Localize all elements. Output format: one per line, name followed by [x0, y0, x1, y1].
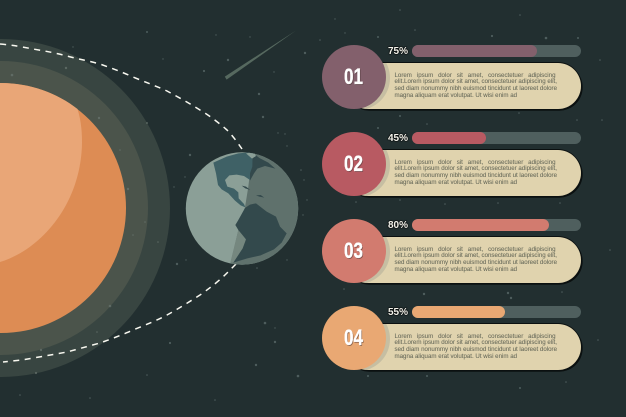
item 04 [322, 306, 583, 372]
number 01: 01 [344, 64, 364, 89]
body text 02 [394, 158, 557, 186]
body text 01: elit.Lorem ipsum dolor sit amet, consectetuer adipiscing elit, [394, 78, 557, 85]
body text 02: magna aliquam erat volutpat. Ut wisi enim ad [394, 179, 517, 186]
text panel 03 [345, 236, 581, 283]
body text 03 [394, 246, 557, 273]
circle 02 [322, 132, 386, 196]
sun with glow rings [0, 39, 170, 377]
body text 01: magna aliquam erat volutpat. Ut wisi enim ad [394, 92, 517, 99]
body text 03: magna aliquam erat volutpat. Ut wisi enim ad [394, 266, 517, 273]
percentage 45%: 45% [388, 132, 408, 144]
Arctic patch [246, 152, 256, 159]
Caribbean islands [242, 186, 264, 198]
circle 01 [322, 45, 386, 109]
text panel 04 [345, 324, 581, 370]
body text 02: sed diam nonummy nibh euismod tincidunt ut laoreet dolore [394, 172, 557, 179]
body text 04: Lorem ipsum dolor sit amet, consectetuer adipiscing [394, 332, 556, 340]
North America, lit side [213, 152, 253, 207]
number 03: 03 [344, 238, 364, 263]
sun outer ring [0, 39, 170, 377]
percentage 55%: 55% [388, 306, 408, 318]
earth globe base [186, 152, 298, 265]
body text 03: sed diam nonummy nibh euismod tincidunt ut laoreet dolore [394, 259, 557, 266]
body text 01: Lorem ipsum dolor sit amet, consectetuer adipiscing [394, 72, 556, 78]
ring stars [11, 67, 159, 374]
progress bar 75% [412, 45, 581, 57]
number 02: 02 [344, 151, 364, 176]
sun highlight [0, 83, 82, 262]
progress bar 45% [412, 132, 581, 144]
orbit path [0, 44, 242, 149]
body text 04 [394, 332, 557, 360]
body text 02: elit.Lorem ipsum dolor sit amet, consectetuer adipiscing elit, [394, 165, 557, 172]
earth [186, 150, 303, 270]
sun disc [0, 83, 126, 333]
body text 02: Lorem ipsum dolor sit amet, consectetuer adipiscing [394, 158, 556, 166]
body text 01 [394, 72, 557, 99]
shaded patch below South America [230, 230, 246, 263]
body text 04: elit.Lorem ipsum dolor sit amet, consectetuer adipiscing elit, [394, 339, 557, 346]
text panel 01 [345, 62, 581, 109]
body text 03: Lorem ipsum dolor sit amet, consectetuer adipiscing [394, 246, 556, 252]
text panel 02 [345, 150, 581, 196]
progress bar 55% [412, 306, 581, 318]
circle 03 [322, 219, 386, 283]
item 03 [322, 219, 583, 285]
number 04: 04 [344, 325, 364, 350]
body text 04: magna aliquam erat volutpat. Ut wisi enim ad [394, 353, 517, 360]
percentage 80%: 80% [388, 220, 408, 230]
sun inner ring [0, 61, 148, 355]
item 02 [322, 132, 583, 198]
earth shaded side [230, 154, 298, 265]
comet [225, 30, 296, 80]
North America, shaded side [250, 155, 275, 180]
South America [233, 203, 287, 263]
item 01 [322, 45, 583, 111]
progress bar 80% [412, 219, 581, 231]
body text 01: sed diam nonummy nibh euismod tincidunt ut laoreet dolore [394, 85, 557, 92]
percentage 75%: 75% [388, 46, 408, 56]
body text 04: sed diam nonummy nibh euismod tincidunt ut laoreet dolore [394, 346, 557, 353]
body text 03: elit.Lorem ipsum dolor sit amet, consectetuer adipiscing elit, [394, 252, 557, 259]
circle 04 [322, 306, 386, 370]
